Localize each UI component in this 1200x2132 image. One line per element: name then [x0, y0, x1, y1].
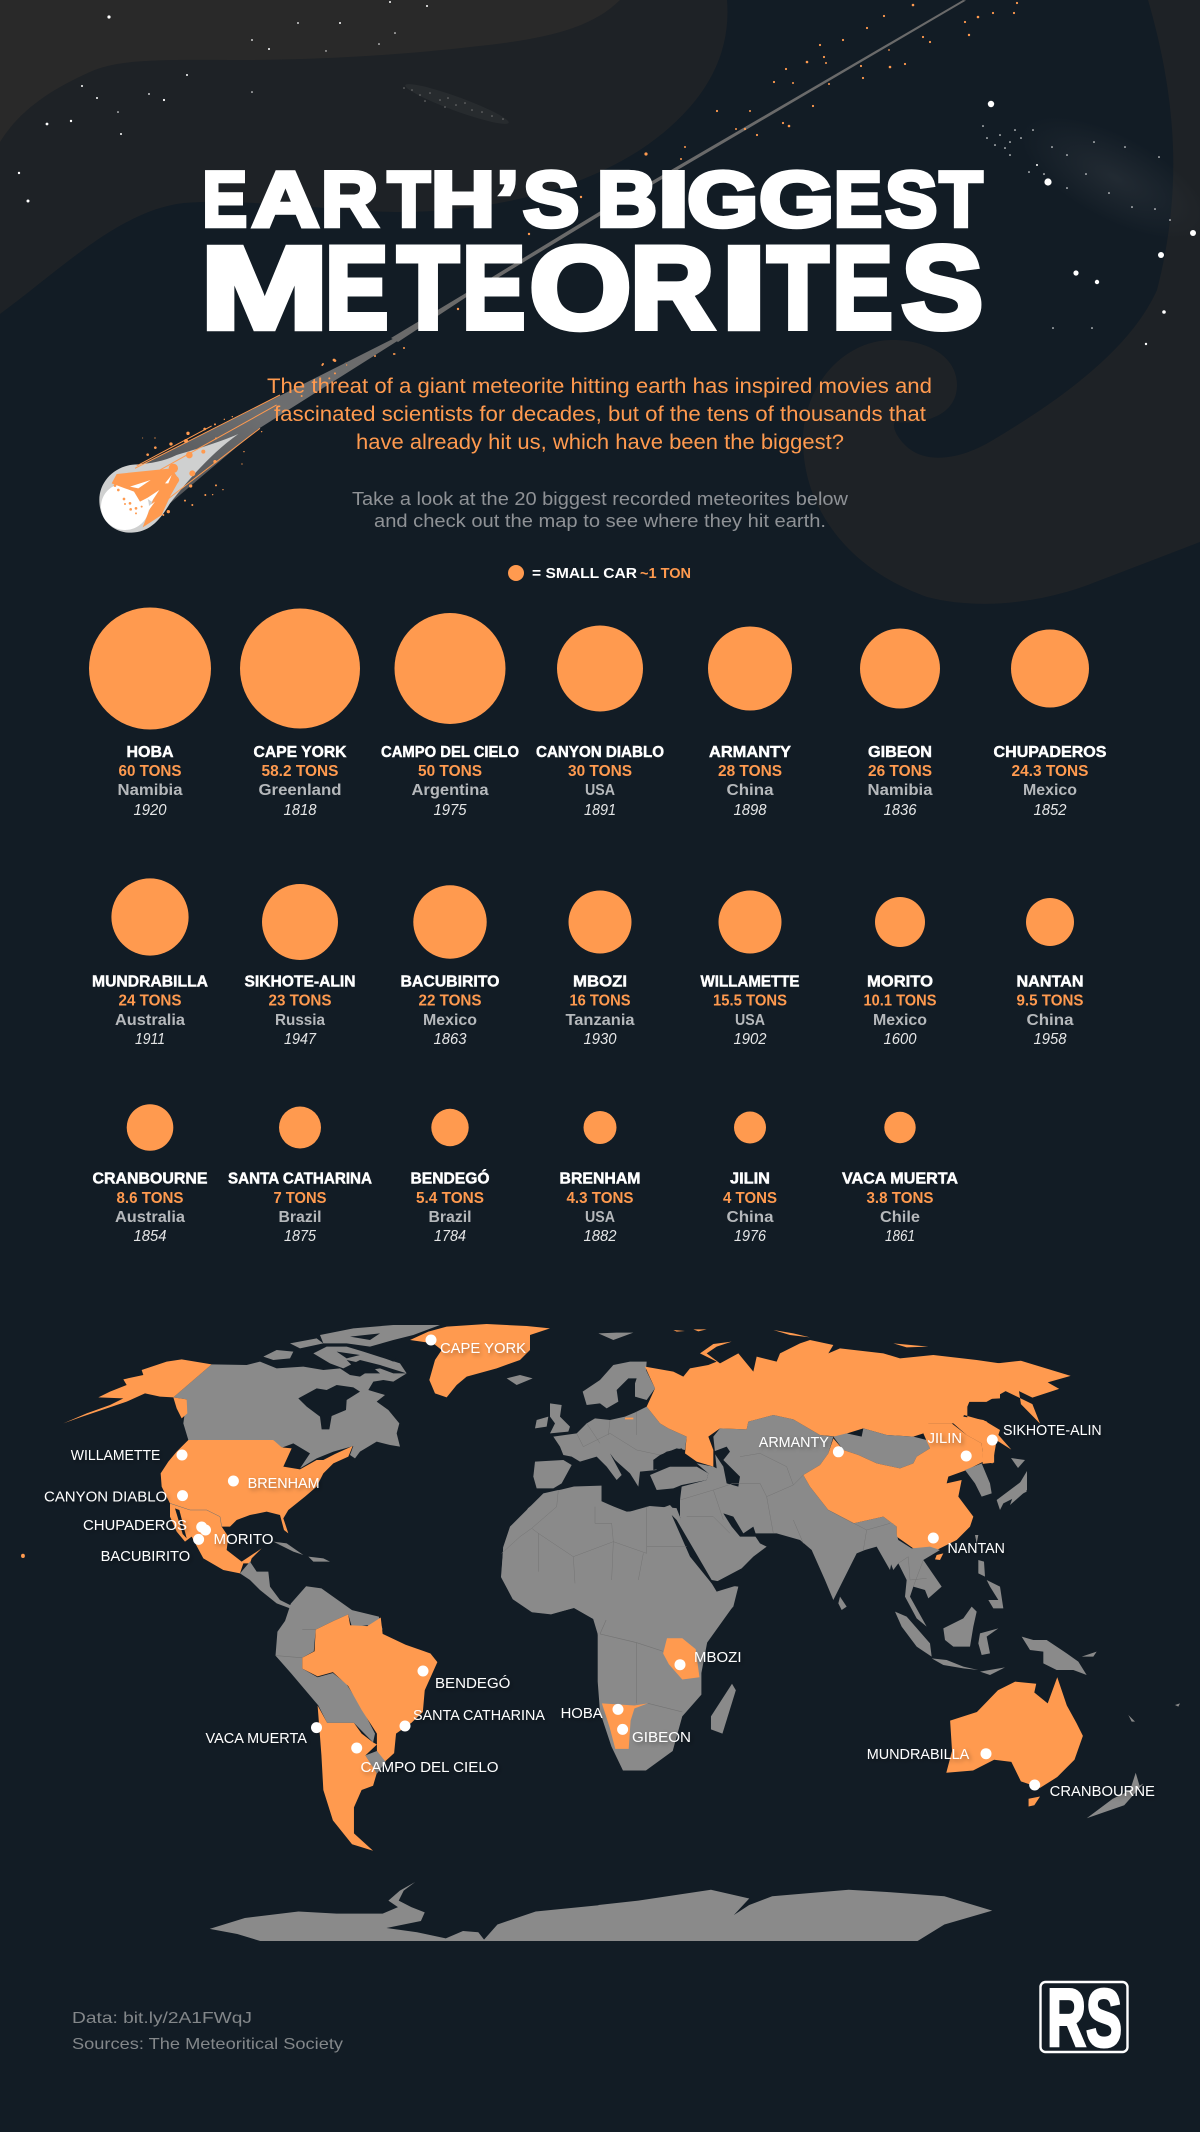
- meteorite: Armanty: 1898: [734, 802, 767, 819]
- Hawaii: [21, 1554, 25, 1558]
- meteorite: Bacubirito: Mexico: [423, 1012, 477, 1029]
- logo: RS: RS: [1047, 1973, 1122, 2064]
- Canada: [173, 1362, 407, 1468]
- title line 1: A: [252, 155, 319, 243]
- title line 1: G: [687, 155, 758, 243]
- pin: Sikhote-Alin: SIKHOTE-ALIN: [1003, 1423, 1102, 1439]
- meteorite: Cape York: 58.2 TONS: [262, 763, 338, 780]
- meteorite: Sikhote-Alin: 23 TONS: [268, 992, 332, 1010]
- title line 1: S: [523, 155, 579, 243]
- North America: [63, 1324, 550, 1608]
- meteorite: Cape York: CAPE YORK: [254, 744, 347, 761]
- Brazil: [302, 1614, 437, 1762]
- pin: Gibeon: GIBEON: [632, 1730, 691, 1746]
- Sri Lanka: [838, 1597, 847, 1610]
- meteorite: Willamette: USA: [735, 1012, 765, 1029]
- pin: Morito: MORITO: [214, 1532, 274, 1548]
- meteorite: Bendegó: BENDEGÓ: [410, 1170, 490, 1188]
- meteorite: Sikhote-Alin: Russia: [275, 1012, 325, 1029]
- meteorite: Vaca Muerta: 1861: [885, 1228, 915, 1245]
- meteorite: Hoba: HOBA: [126, 744, 174, 761]
- Pacific islands: [1128, 1703, 1180, 1722]
- meteorite: Morito: MORITO: [867, 974, 933, 990]
- meteorite: Brenham: USA: [585, 1209, 615, 1226]
- meteorite: Mbozi: 16 TONS: [570, 992, 630, 1010]
- meteorite: Jilin: 1976: [734, 1228, 766, 1245]
- meteorite: Bendegó: 5.4 TONS: [416, 1190, 484, 1207]
- meteorite: Gibeon: GIBEON: [868, 744, 932, 761]
- pin: Nantan: [928, 1532, 1005, 1557]
- USA: [161, 1440, 353, 1533]
- pin: Bendegó: [418, 1666, 510, 1692]
- meteorite: Gibeon: [860, 628, 940, 819]
- pin: Vaca Muerta: [206, 1722, 322, 1747]
- Iceland: [507, 1375, 533, 1385]
- meteorite: Nantan: 1958: [1034, 1031, 1067, 1048]
- stardust patch: [403, 79, 511, 129]
- Central and South Asia: [680, 1415, 897, 1600]
- meteor head halo: [99, 434, 238, 533]
- pin: Cranbourne: CRANBOURNE: [1050, 1784, 1155, 1800]
- Russian Far East: [964, 1361, 1071, 1464]
- meteorite: Armanty: China: [726, 782, 774, 799]
- meteorite: Campo del Cielo: 50 TONS: [418, 763, 482, 780]
- meteorite: Nantan: China: [1026, 1012, 1074, 1029]
- meteorite: Sikhote-Alin: [244, 884, 356, 1048]
- pin: Nantan: NANTAN: [948, 1541, 1005, 1557]
- title: [200, 155, 983, 353]
- nebula glow: [1003, 92, 1200, 264]
- sources: Sources: The Meteoritical Society: [72, 2036, 343, 2053]
- meteor white core: [101, 483, 149, 530]
- meteorite: Chupaderos: 1852: [1034, 802, 1067, 819]
- meteor streaks and sparks: [135, 395, 280, 500]
- meteorite: Armanty: 28 TONS: [718, 763, 782, 780]
- meteorite: Cape York: Greenland: [258, 782, 342, 799]
- title line 1: G: [759, 155, 834, 243]
- pin: Campo del Cielo: CAMPO DEL CIELO: [360, 1760, 498, 1776]
- meteorite: Bacubirito: [400, 885, 500, 1048]
- Australia: [946, 1677, 1083, 1807]
- meteorite: Hoba: Namibia: [118, 782, 183, 799]
- title line 2: E: [325, 222, 388, 353]
- world map: [21, 1324, 1180, 1941]
- title line 2: T: [767, 222, 828, 353]
- Namibia: [602, 1703, 648, 1749]
- pin: Bacubirito: BACUBIRITO: [101, 1549, 190, 1565]
- meteorite: Bacubirito: BACUBIRITO: [400, 974, 500, 990]
- title line 2: E: [833, 222, 893, 353]
- pin: Canyon Diablo: CANYON DIABLO: [44, 1490, 167, 1506]
- Caribbean islands: [273, 1542, 330, 1562]
- Central America: [240, 1562, 293, 1608]
- meteorite: Morito: 10.1 TONS: [864, 992, 936, 1010]
- western hemisphere south: [21, 1486, 602, 1941]
- meteorite: Bacubirito: 1863: [434, 1031, 467, 1048]
- Svalbard: [598, 1333, 633, 1340]
- title line 2: R: [630, 222, 714, 353]
- meteorite bubble chart: [89, 608, 1106, 1245]
- title line 1: S: [885, 155, 937, 243]
- meteorite: Mundrabilla: 24 TONS: [118, 992, 182, 1010]
- Scandinavia: [583, 1362, 655, 1408]
- meteorite: Canyon Diablo: 1891: [584, 802, 616, 819]
- legend circle: [508, 565, 524, 581]
- meteorite: Santa Catharina: Brazil: [278, 1209, 322, 1226]
- meteorite: Mbozi: 1930: [584, 1031, 617, 1048]
- title line 1: E: [202, 155, 247, 243]
- Caspian Sea: [713, 1447, 740, 1487]
- meteorite: Brenham: BRENHAM: [560, 1170, 640, 1188]
- meteorite: Chupaderos: Mexico: [1023, 782, 1077, 799]
- meteorite: Chupaderos: 24.3 TONS: [1012, 763, 1088, 780]
- meteorite: Vaca Muerta: 3.8 TONS: [866, 1190, 934, 1207]
- New Guinea: [1022, 1637, 1097, 1675]
- meteorite: Armanty: [708, 626, 792, 819]
- pin: Hoba: HOBA: [561, 1706, 603, 1722]
- meteorite: Gibeon: 1836: [884, 802, 917, 819]
- meteorite: Mundrabilla: [92, 878, 208, 1048]
- China: [803, 1423, 983, 1560]
- meteorite: Cranbourne: CRANBOURNE: [92, 1170, 208, 1188]
- Red Sea and Gulf of Aden: [672, 1515, 738, 1592]
- Hudson Bay: [298, 1385, 360, 1429]
- secondary line 1: Take a look at the 20 biggest recorded meteorites below: [352, 489, 849, 509]
- Mexico: [170, 1503, 262, 1573]
- meteorite: Campo del Cielo: Argentina: [412, 782, 489, 799]
- meteor tail: [137, 337, 400, 503]
- meteorite: Jilin: [723, 1112, 777, 1245]
- meteorite: Hoba: [89, 608, 211, 819]
- pin: Cape York: CAPE YORK: [440, 1341, 526, 1357]
- Africa north: [501, 1488, 738, 1620]
- meteorite: Canyon Diablo: 30 TONS: [568, 763, 632, 780]
- southern landmasses: [21, 1361, 1143, 1941]
- Arctic channels: [293, 1333, 397, 1373]
- meteorite: Nantan: NANTAN: [1016, 974, 1084, 990]
- meteorite: Canyon Diablo: CANYON DIABLO: [536, 744, 664, 761]
- meteorite: Cranbourne: 8.6 TONS: [116, 1190, 184, 1207]
- pin: Morito: [200, 1524, 274, 1548]
- Spain: [533, 1460, 572, 1488]
- meteorite: Santa Catharina: 7 TONS: [274, 1190, 326, 1207]
- pin: Willamette: WILLAMETTE: [71, 1448, 161, 1464]
- meteorite: Campo del Cielo: 1975: [434, 802, 467, 819]
- Africa west: [501, 1486, 602, 1647]
- meteorite: Santa Catharina: SANTA CATHARINA: [228, 1170, 372, 1188]
- orange sparks: [322, 2, 1018, 365]
- meteor orange flare: [112, 468, 179, 527]
- meteorite: Gibeon: 26 TONS: [868, 763, 932, 780]
- title line 1: ’: [496, 155, 519, 243]
- pin: Mbozi: [674, 1650, 742, 1670]
- Africa east: [598, 1499, 738, 1771]
- meteorite: Campo del Cielo: CAMPO DEL CIELO: [381, 744, 519, 761]
- Indonesia and Philippines: [895, 1535, 1005, 1675]
- meteor trail line: [391, 0, 966, 342]
- meteorite: Cranbourne: [92, 1104, 208, 1245]
- pin: Jilin: [928, 1431, 972, 1462]
- meteorite: Mbozi: [566, 890, 635, 1048]
- Uruguay: [365, 1751, 386, 1774]
- meteorite: Canyon Diablo: [536, 626, 664, 819]
- meteorite: Jilin: China: [726, 1209, 774, 1226]
- pin: Vaca Muerta: VACA MUERTA: [206, 1731, 307, 1747]
- pin: Cranbourne: [1029, 1780, 1155, 1800]
- legend: [508, 565, 691, 582]
- Gulf of California: [175, 1508, 187, 1538]
- meteorite: Nantan: 9.5 TONS: [1016, 992, 1084, 1010]
- meteorite: Armanty: ARMANTY: [709, 744, 792, 761]
- meteorite: Bendegó: 1784: [434, 1228, 466, 1245]
- title line 1: E: [834, 155, 882, 243]
- meteorite: Vaca Muerta: VACA MUERTA: [842, 1170, 958, 1188]
- meteorite: Cranbourne: 1854: [134, 1228, 167, 1245]
- meteorite: Canyon Diablo: USA: [585, 782, 615, 799]
- Mongolia: [833, 1428, 930, 1468]
- title line 1: T: [388, 155, 430, 243]
- meteorite: Sikhote-Alin: SIKHOTE-ALIN: [244, 974, 356, 990]
- meteorite: Vaca Muerta: Chile: [880, 1209, 920, 1226]
- meteorite: Jilin: JILIN: [730, 1170, 770, 1188]
- meteorite: Cape York: 1818: [284, 802, 317, 819]
- meteorite: Santa Catharina: 1875: [284, 1228, 316, 1245]
- title line 2: I: [721, 222, 767, 353]
- Black Sea: [653, 1448, 697, 1470]
- secondary line 2: and check out the map to see where they hit earth.: [374, 511, 826, 531]
- pin: Mundrabilla: MUNDRABILLA: [867, 1747, 970, 1763]
- meteorite: Willamette: 15.5 TONS: [713, 992, 787, 1010]
- meteorite: Brenham: 4.3 TONS: [566, 1190, 634, 1207]
- Southeast Asia: [875, 1480, 1180, 1722]
- footer sources: [72, 2010, 343, 2053]
- meteorite: Chupaderos: [994, 630, 1106, 819]
- Arctic islands: [263, 1325, 440, 1373]
- logo: RS: [1040, 1973, 1128, 2064]
- eastern hemisphere south: [598, 1361, 1143, 1941]
- Antarctica east: [598, 1890, 992, 1941]
- intro line 3: have already hit us, which have been the biggest?: [356, 430, 844, 454]
- Japan north: [1010, 1458, 1027, 1505]
- pin: Santa Catharina: [400, 1708, 545, 1732]
- Russia: [645, 1340, 1000, 1467]
- intro line 2: fascinated scientists for decades, but of the tens of thousands that: [274, 402, 926, 426]
- title line 2: E: [462, 222, 525, 353]
- legend value: ~1 TON: [640, 566, 691, 582]
- Korea: [965, 1463, 992, 1497]
- pin: Hoba: [561, 1704, 624, 1722]
- pin: Sikhote-Alin: [987, 1423, 1102, 1446]
- meteorite: Mbozi: MBOZI: [573, 974, 627, 990]
- pin: Mbozi: MBOZI: [694, 1650, 742, 1666]
- pin: Gibeon: [617, 1724, 691, 1746]
- meteorite: Brenham: 1882: [584, 1228, 617, 1245]
- meteorite: Gibeon: Namibia: [868, 782, 933, 799]
- meteor flare details: [130, 475, 172, 513]
- title line 1: R: [321, 155, 378, 243]
- meteorite: Brenham: [560, 1111, 640, 1245]
- intro text: [267, 374, 932, 454]
- meteorite: Bendegó: Brazil: [428, 1209, 472, 1226]
- intro line 1: The threat of a giant meteorite hitting earth has inspired movies and: [267, 374, 932, 398]
- meteorite: Campo del Cielo: [381, 613, 519, 819]
- meteorite: Morito: 1600: [884, 1031, 917, 1048]
- meteorite: Willamette: 1902: [734, 1031, 767, 1048]
- meteorite: Hoba: 1920: [134, 802, 167, 819]
- Greenland: [410, 1324, 550, 1397]
- Antarctica west: [210, 1882, 602, 1941]
- meteorite: Bacubirito: 22 TONS: [418, 992, 482, 1010]
- meteorite: Willamette: WILLAMETTE: [700, 974, 800, 990]
- Turkey: [650, 1467, 708, 1490]
- pin: Armanty: [759, 1435, 844, 1457]
- Persian Gulf: [723, 1513, 757, 1537]
- New Zealand: [1087, 1773, 1143, 1818]
- pin: Bendegó: BENDEGÓ: [435, 1675, 510, 1692]
- title line 2: T: [397, 222, 459, 353]
- title line 1: B: [597, 155, 657, 243]
- Alaska: [63, 1359, 212, 1423]
- meteorite: Morito: [864, 897, 936, 1048]
- meteorite: Bendegó: [410, 1109, 490, 1245]
- title line 1: H: [431, 155, 495, 243]
- background: space blobs: [0, 0, 1200, 604]
- meteor: [99, 337, 400, 533]
- pin: Armanty: ARMANTY: [759, 1435, 829, 1451]
- meteorite: Chupaderos: CHUPADEROS: [994, 744, 1106, 761]
- pin: Bacubirito: [101, 1534, 204, 1565]
- data link: Data: bit.ly/2A1FWqJ: [72, 2010, 252, 2027]
- meteorite: Vaca Muerta: [842, 1112, 958, 1245]
- meteorite: Mundrabilla: MUNDRABILLA: [92, 974, 208, 990]
- title line 2: O: [529, 222, 631, 353]
- Madagascar: [711, 1684, 736, 1734]
- meteorite: Santa Catharina: [228, 1106, 372, 1245]
- pin: Campo del Cielo: [351, 1742, 498, 1776]
- meteorite: Morito: Mexico: [873, 1012, 927, 1029]
- stars: [18, 1, 1196, 345]
- pin: Jilin: JILIN: [928, 1431, 962, 1447]
- Tanzania: [663, 1638, 699, 1679]
- Japan: [997, 1480, 1027, 1510]
- meteorite: Mundrabilla: 1911: [135, 1031, 165, 1048]
- title line 1: T: [940, 155, 982, 243]
- Indochina: [875, 1523, 942, 1627]
- meteorite: Mundrabilla: Australia: [115, 1012, 185, 1029]
- meteorite: Nantan: [1016, 898, 1084, 1048]
- title line 2: S: [902, 222, 983, 353]
- South America north and west: [276, 1586, 383, 1742]
- meteorite: Cape York: [240, 608, 360, 819]
- title line 1: I: [658, 155, 689, 243]
- legend label: = SMALL CAR: [532, 566, 638, 582]
- meteorite: Mbozi: Tanzania: [566, 1012, 635, 1029]
- pin: Chupaderos: CHUPADEROS: [83, 1518, 187, 1534]
- Argentina and Chile: [318, 1705, 377, 1851]
- meteorite: Cranbourne: Australia: [115, 1209, 185, 1226]
- meteorite: Hoba: 60 TONS: [118, 763, 182, 780]
- title line 2: M: [200, 222, 328, 353]
- pin: Santa Catharina: SANTA CATHARINA: [413, 1708, 545, 1724]
- map pins and labels: [44, 1334, 1155, 1800]
- meteorite: Willamette: [700, 890, 800, 1048]
- meteorite: Jilin: 4 TONS: [723, 1190, 777, 1207]
- meteorite: Sikhote-Alin: 1947: [284, 1031, 317, 1048]
- secondary intro text: [352, 489, 849, 531]
- Europe: [553, 1407, 687, 1487]
- pin: Brenham: BRENHAM: [248, 1476, 320, 1492]
- British Isles: [535, 1403, 570, 1433]
- Russian Arctic islands: [625, 1329, 928, 1419]
- pin: Cape York: [426, 1334, 526, 1357]
- Eurasia and northern Africa: [501, 1329, 1000, 1620]
